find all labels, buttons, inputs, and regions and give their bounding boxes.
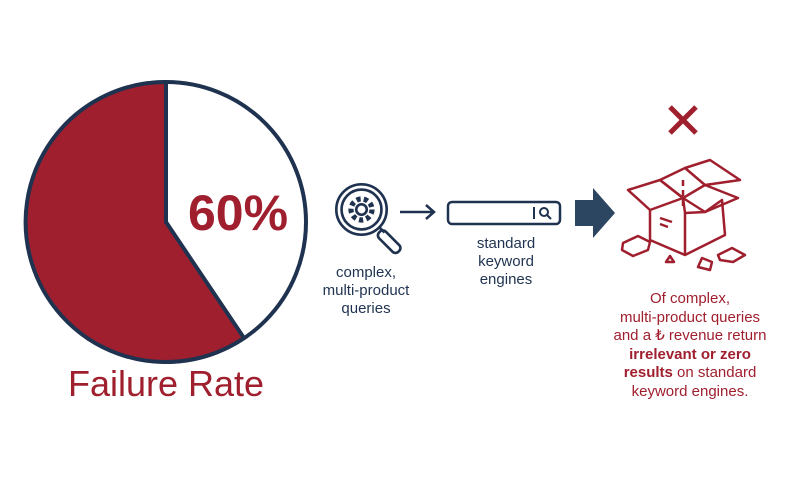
text: complex queries: complex, [336, 264, 396, 281]
text: description: multi-product queries [620, 308, 760, 326]
text: description [614, 290, 766, 400]
text: standard keyword engines [477, 235, 535, 288]
pie chart [24, 80, 308, 364]
icon: broken box [620, 158, 746, 272]
icon: search bar [446, 200, 562, 226]
arrow: big [575, 188, 615, 238]
text: complex queries: multi-product [323, 282, 409, 299]
text: description: irrelevant or zero [629, 346, 751, 362]
icon: X mark [668, 105, 698, 135]
pie chart: 60% [188, 185, 288, 241]
text: complex queries [323, 264, 410, 317]
label: failure rate: Failure Rate [68, 363, 264, 404]
icon: magnifier with gear [335, 183, 402, 254]
text: standard keyword engines: standard [477, 235, 535, 252]
text: standard keyword engines: engines [480, 271, 532, 288]
arrow: small [400, 204, 436, 220]
text: description: Of complex, [650, 290, 730, 307]
text: complex queries: queries [341, 300, 391, 317]
text: description: results on standard [624, 364, 756, 381]
text: standard keyword engines: keyword [478, 253, 534, 270]
text: description: keyword engines. [632, 382, 748, 400]
text: description: and a ₺ revenue return [614, 327, 766, 344]
